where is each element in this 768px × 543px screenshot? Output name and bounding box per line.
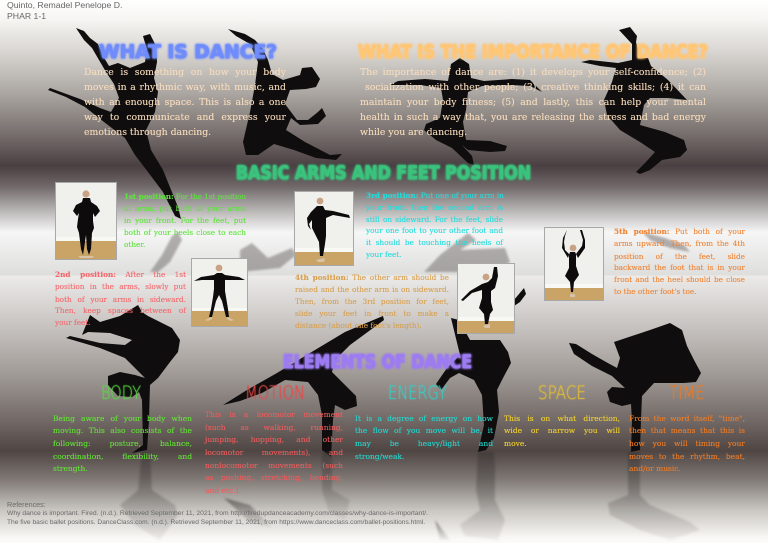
text: time: moves to the rhythm, beat, bbox=[629, 452, 745, 461]
text: energy: strong/weak. bbox=[355, 452, 404, 461]
text: 5th position: front and the heel should be close bbox=[614, 275, 745, 284]
text: space: wide or narrow you will bbox=[504, 426, 620, 435]
text: 3rd position: your front, then the second arm is bbox=[366, 203, 503, 212]
text: 4th position: raised and the other arm is on sideward. bbox=[295, 285, 449, 294]
text: 3rd position bbox=[366, 191, 504, 259]
text: motion: This is a locomotor movement bbox=[205, 410, 343, 419]
text: motion: nonlocomotor movements (such bbox=[205, 461, 343, 470]
text: 1st position bbox=[124, 192, 246, 249]
text: 4th position: Then, from the 3rd position for feet, bbox=[295, 297, 449, 306]
text: 2nd position: position in the arms, slowly put bbox=[55, 282, 186, 291]
element label: energy: ENERGY bbox=[388, 382, 447, 404]
text: 3rd position: your one foot to your other foot and bbox=[366, 226, 503, 235]
element label: space: SPACE bbox=[538, 382, 586, 404]
photo: 4th position bbox=[458, 264, 514, 333]
text: motion: locomotor movements), and bbox=[205, 448, 343, 457]
photo: 5th position bbox=[545, 228, 603, 300]
element label: body: BODY bbox=[101, 382, 141, 404]
photo: 3rd position bbox=[295, 192, 353, 265]
text: energy bbox=[355, 414, 493, 461]
heading: basic arms and feet position: BASIC ARMS AND FEET POSITION bbox=[236, 162, 531, 184]
reflections of upper dancers bbox=[150, 232, 690, 272]
text: motion: jumping, hopping, and other bbox=[205, 435, 343, 444]
text: space: This is on what direction, bbox=[504, 414, 620, 423]
text: 5th position: backward the foot that is in your bbox=[614, 263, 745, 272]
references bbox=[7, 500, 428, 526]
dancer 8: handstand figure right bbox=[569, 323, 701, 452]
text: 2nd position: both of your arms in sideward. bbox=[55, 295, 186, 304]
text: 1st position: other. bbox=[124, 240, 145, 249]
text: importance of dance bbox=[360, 67, 706, 138]
text: 2nd position: Then, keep spaces between of bbox=[55, 306, 186, 315]
text: 5th position bbox=[614, 227, 746, 296]
text: 2nd position: 2nd position: After the 1st bbox=[55, 270, 186, 279]
dancer 5: handstand figure lower left bbox=[66, 305, 180, 453]
text: 4th position: slide your feet in front to make a bbox=[295, 309, 449, 318]
heading: elements of dance: ELEMENTS OF DANCE bbox=[283, 351, 472, 373]
dancer 7: handstand figure centre bbox=[436, 318, 511, 452]
text: motion bbox=[204, 410, 343, 495]
text: energy: It is a degree of energy on how bbox=[355, 414, 493, 423]
text: motion: (such as walking, running, bbox=[205, 423, 343, 432]
author name and section: Quinto, Remadel Penelope D. bbox=[7, 0, 122, 10]
text: 2nd position bbox=[54, 270, 186, 327]
text: 4th position: 4th position: The other arm should be bbox=[295, 273, 449, 282]
text: motion: and etc.). bbox=[205, 486, 241, 495]
text: 1st position: of arms, put both of your arms bbox=[124, 204, 246, 213]
text: importance of dance: The importance of dance are: (1) it develops your self-confidence; (2) bbox=[360, 67, 706, 78]
text: importance of dance: while you are dancing. bbox=[360, 127, 467, 138]
text: what is dance: emotions through dancing. bbox=[84, 127, 211, 138]
dancer 3: split jump figure bbox=[390, 58, 542, 165]
text: energy: the flow of you move will be, it bbox=[355, 426, 493, 435]
text: 3rd position: your feet. bbox=[366, 250, 402, 259]
heading: importance of dance: WHAT IS THE IMPORTANCE OF DANCE? bbox=[358, 41, 708, 63]
text: energy: may be heavy/light and bbox=[355, 439, 493, 448]
dancer 2: running figure bbox=[228, 29, 342, 160]
dancer 1: leaping figure left bbox=[48, 28, 181, 219]
text: 1st position: 1st position: For the 1st position bbox=[124, 192, 246, 201]
text: body: Being aware of your body when bbox=[53, 414, 192, 423]
text: what is dance: with an enough space. This is also a one bbox=[84, 97, 286, 108]
text: body: following: posture, balance, bbox=[53, 439, 192, 448]
text: what is dance: moves in a rhythmic way, with music, and bbox=[84, 82, 286, 93]
text: 2nd position: your feet. bbox=[55, 318, 91, 327]
text: what is dance bbox=[84, 67, 286, 138]
text: what is dance: Dance is something on how your body bbox=[84, 67, 286, 78]
text: time: and/or music. bbox=[629, 464, 681, 473]
text: body: coordination, flexibility, and bbox=[53, 452, 192, 461]
text: body bbox=[53, 414, 192, 473]
photo: 1st position bbox=[56, 183, 116, 259]
text: 5th position: arms upward. Then, from the 4th bbox=[614, 239, 745, 248]
text: 5th position: 5th position: Put both of your bbox=[614, 227, 745, 236]
text: 4th position: distance (about one foot's length). bbox=[295, 321, 422, 330]
references: Why dance is important. Fired. (n.d.). Retrieved September 11, 2021, from http://firedupdanceacademy.com/classes/why-dance-is-important/. bbox=[7, 510, 428, 517]
text: 1st position: in your front. For the feet, put bbox=[124, 216, 246, 225]
heading: what is dance: WHAT IS DANCE? bbox=[99, 41, 277, 63]
text: time: From the word itself, "time", bbox=[629, 414, 745, 423]
text: 3rd position: it should be touching the heels of bbox=[366, 238, 503, 247]
text: time bbox=[629, 414, 745, 473]
reflections of lower dancers bbox=[120, 452, 700, 540]
photo: 2nd position bbox=[192, 259, 247, 326]
text: 5th position: position of the feet, slide bbox=[614, 252, 745, 261]
text: space bbox=[504, 414, 620, 448]
text: 1st position: both of your heels close to each bbox=[124, 228, 246, 237]
element label: time: TIME bbox=[669, 382, 705, 404]
references: References: bbox=[7, 500, 46, 509]
element label: motion: MOTION bbox=[245, 382, 305, 404]
author name and section bbox=[7, 0, 122, 21]
text: importance of dance: health in such a way that, you are releasing the stress and bad energy bbox=[360, 112, 706, 123]
text: 3rd position: still on sideward. For the feet, slide bbox=[366, 215, 503, 224]
text: space: move. bbox=[504, 439, 527, 448]
text: importance of dance: socialization with other people; (3) creative thinking skills; (4) it can bbox=[365, 82, 706, 93]
text: what is dance: way to communicate and express your bbox=[84, 112, 286, 123]
text: motion: as pushing, stretching, bending, bbox=[205, 473, 343, 482]
text: importance of dance: maintain your body fitness; (5) and lastly, this can help your mental bbox=[360, 97, 706, 108]
text: 4th position bbox=[295, 273, 449, 330]
text: time: how you will timing your bbox=[629, 439, 745, 448]
dancer 4: arched leap figure bbox=[581, 27, 687, 174]
author name and section: PHAR 1-1 bbox=[7, 11, 46, 21]
text: body: moving. This also consists of the bbox=[53, 426, 192, 435]
dancer 6: handstand figure centre left bbox=[223, 316, 384, 457]
text: 3rd position: 3rd position: Put one of your arm in bbox=[366, 191, 504, 200]
references: The five basic ballet positions. DanceClass.com. (n.d.). Retrieved September 11, 2021, from https://www.danceclass.com/ballet-positions.html. bbox=[7, 519, 425, 526]
text: 5th position: to the other foot's toe. bbox=[614, 287, 697, 296]
text: time: then that means that this is bbox=[629, 426, 745, 435]
text: body: strength. bbox=[53, 464, 88, 473]
